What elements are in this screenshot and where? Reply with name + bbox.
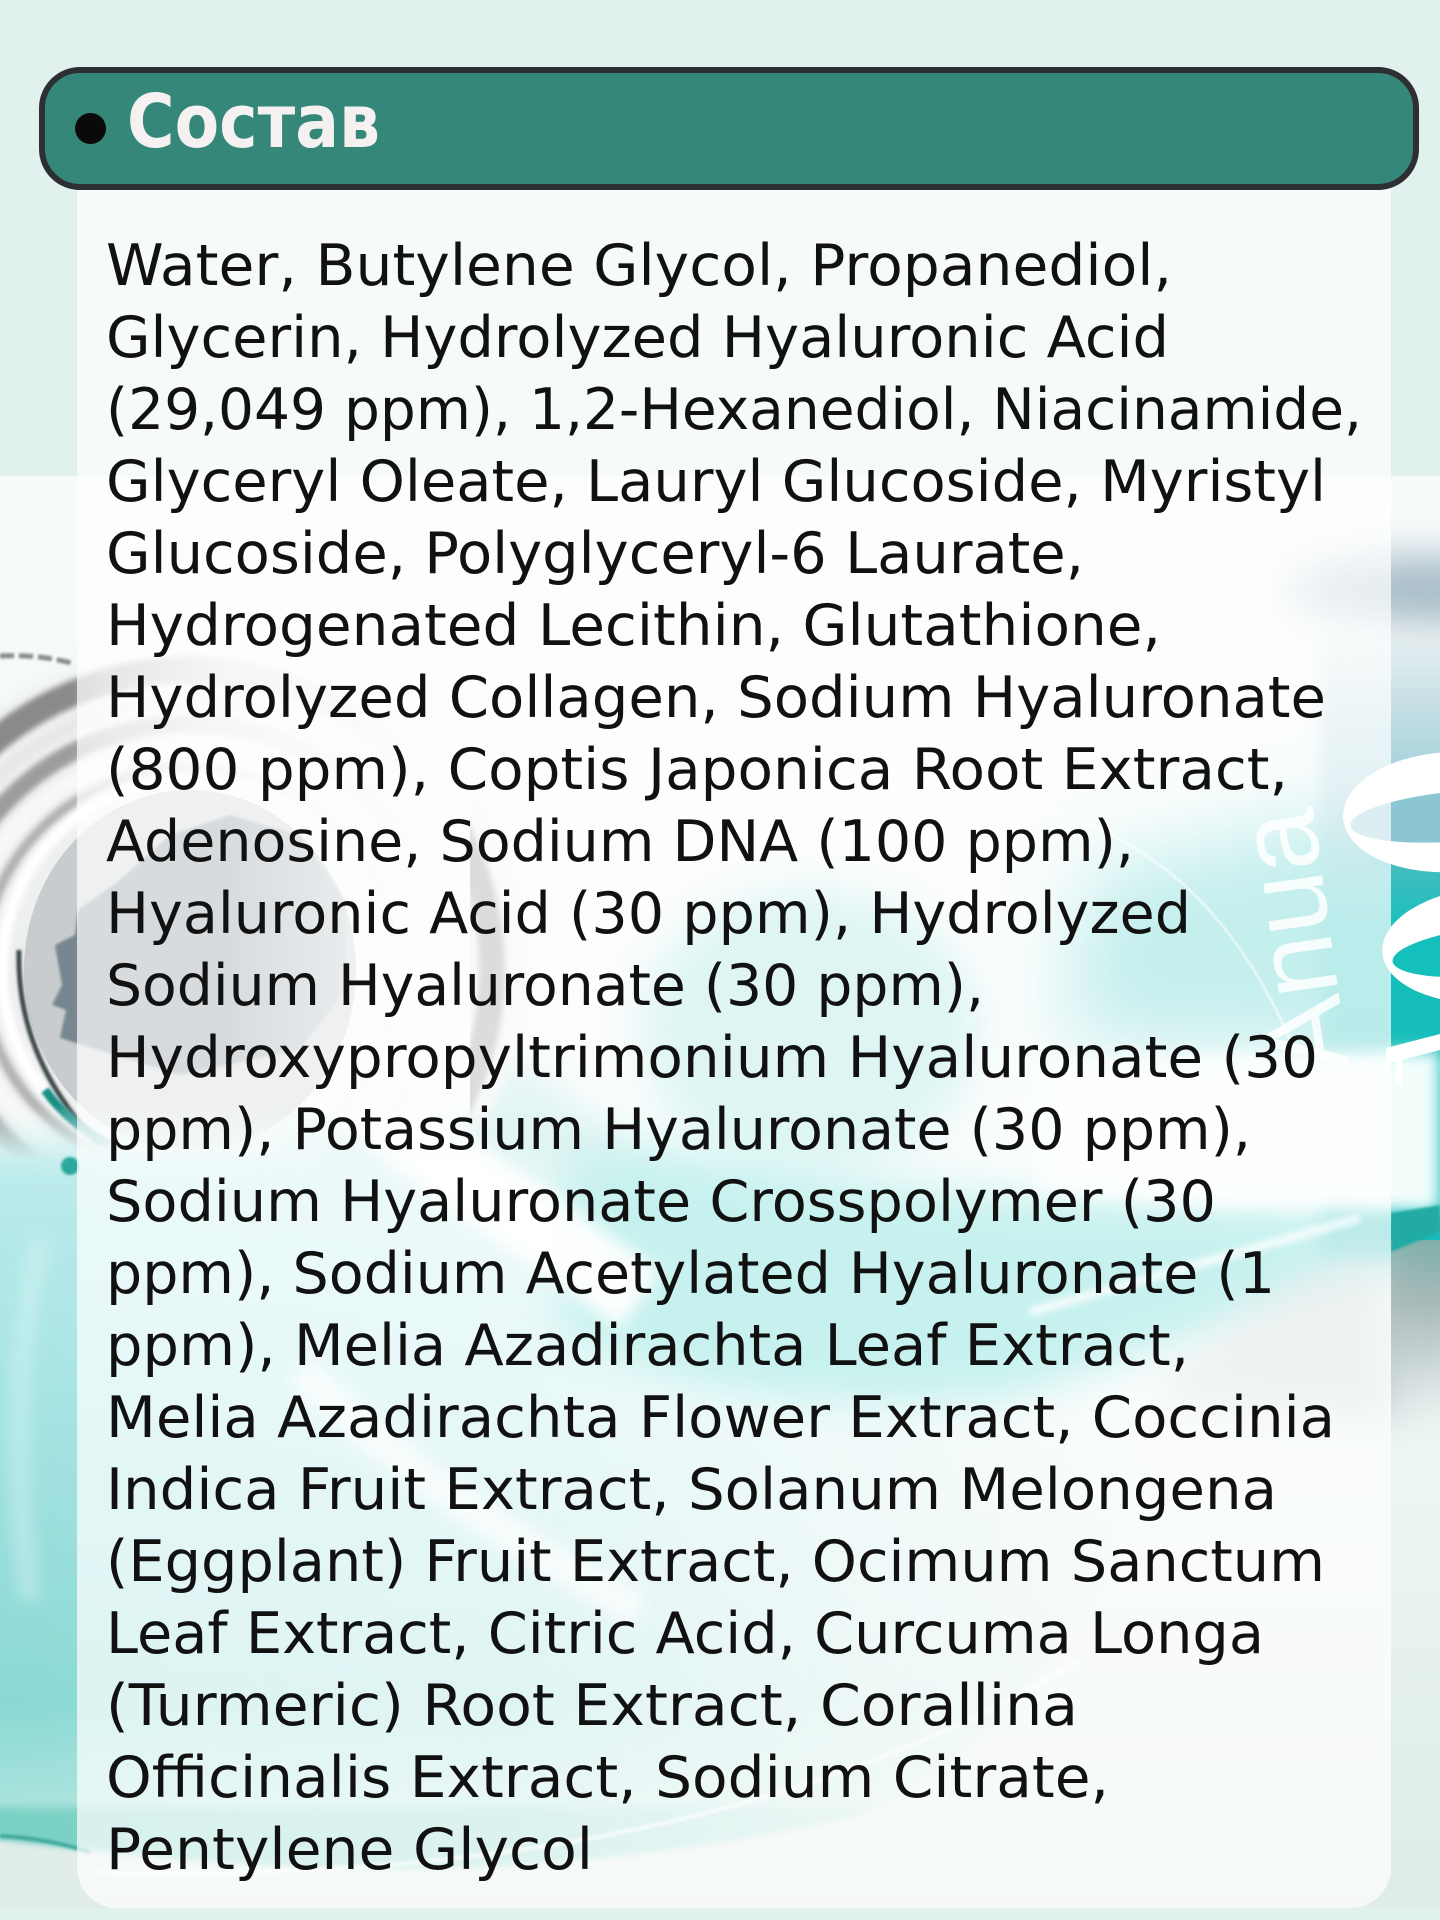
ingredients text block: Hydrolyzed Collagen, Sodium Hyaluronate [106,665,1326,731]
ingredients text block: Hydroxypropyltrimonium Hyaluronate (30 [106,1025,1318,1091]
ingredients text block: Melia Azadirachta Flower Extract, Coccinia [106,1385,1335,1451]
ingredients text block [106,233,1362,1883]
ingredients text block: Leaf Extract, Citric Acid, Curcuma Longa [106,1601,1264,1667]
ingredients text block: Sodium Hyaluronate (30 ppm), [106,953,984,1019]
ingredients text block: Adenosine, Sodium DNA (100 ppm), [106,809,1134,875]
photo: water droplet [61,1157,79,1175]
photo: brand lettering on bottle: Anua [1212,802,1373,1081]
ingredients text block: ppm), Sodium Acetylated Hyaluronate (1 [106,1241,1275,1307]
ingredients text block: Glyceryl Oleate, Lauryl Glucoside, Myristyl [106,449,1326,515]
ingredients text block: Indica Fruit Extract, Solanum Melongena [106,1457,1277,1523]
ingredients text block: Hyaluronic Acid (30 ppm), Hydrolyzed [106,881,1191,947]
ingredients text block: ppm), Potassium Hyaluronate (30 ppm), [106,1097,1251,1163]
ingredients text block: (29,049 ppm), 1,2-Hexanediol, Niacinamide, [106,377,1362,443]
ingredients text block: Officinalis Extract, Sodium Citrate, [106,1745,1109,1811]
ingredients text block: Sodium Hyaluronate Crosspolymer (30 [106,1169,1216,1235]
ingredients text block: (Eggplant) Fruit Extract, Ocimum Sanctum [106,1529,1325,1595]
photo: brand lettering on bottle [1256,752,1440,1085]
background photo: serum bottle [0,476,1440,1908]
heading bar [42,70,1416,187]
ingredients text block: Pentylene Glycol [106,1817,593,1883]
photo: teal liquid, left [0,1126,932,1870]
photo: right column with bottle colours [1150,556,1440,1460]
ingredients text block: (800 ppm), Coptis Japonica Root Extract, [106,737,1288,803]
ingredients text block: Glycerin, Hydrolyzed Hyaluronic Acid [106,305,1169,371]
photo: metal bottle cap [0,658,508,1155]
photo: central teal gel [240,790,1440,1404]
ingredients text block: ppm), Melia Azadirachta Leaf Extract, [106,1313,1189,1379]
ingredients text block: Water, Butylene Glycol, Propanediol, [106,233,1172,299]
ingredients text block: Glucoside, Polyglyceryl-6 Laurate, [106,521,1084,587]
ingredients text block: Hydrogenated Lecithin, Glutathione, [106,593,1161,659]
heading text: Состав [127,79,380,165]
icon: heading bullet [75,113,106,144]
photo: white highlight bands [90,800,1440,1873]
ingredients text block: (Turmeric) Root Extract, Corallina [106,1673,1078,1739]
photo: cap ridges [0,656,75,664]
